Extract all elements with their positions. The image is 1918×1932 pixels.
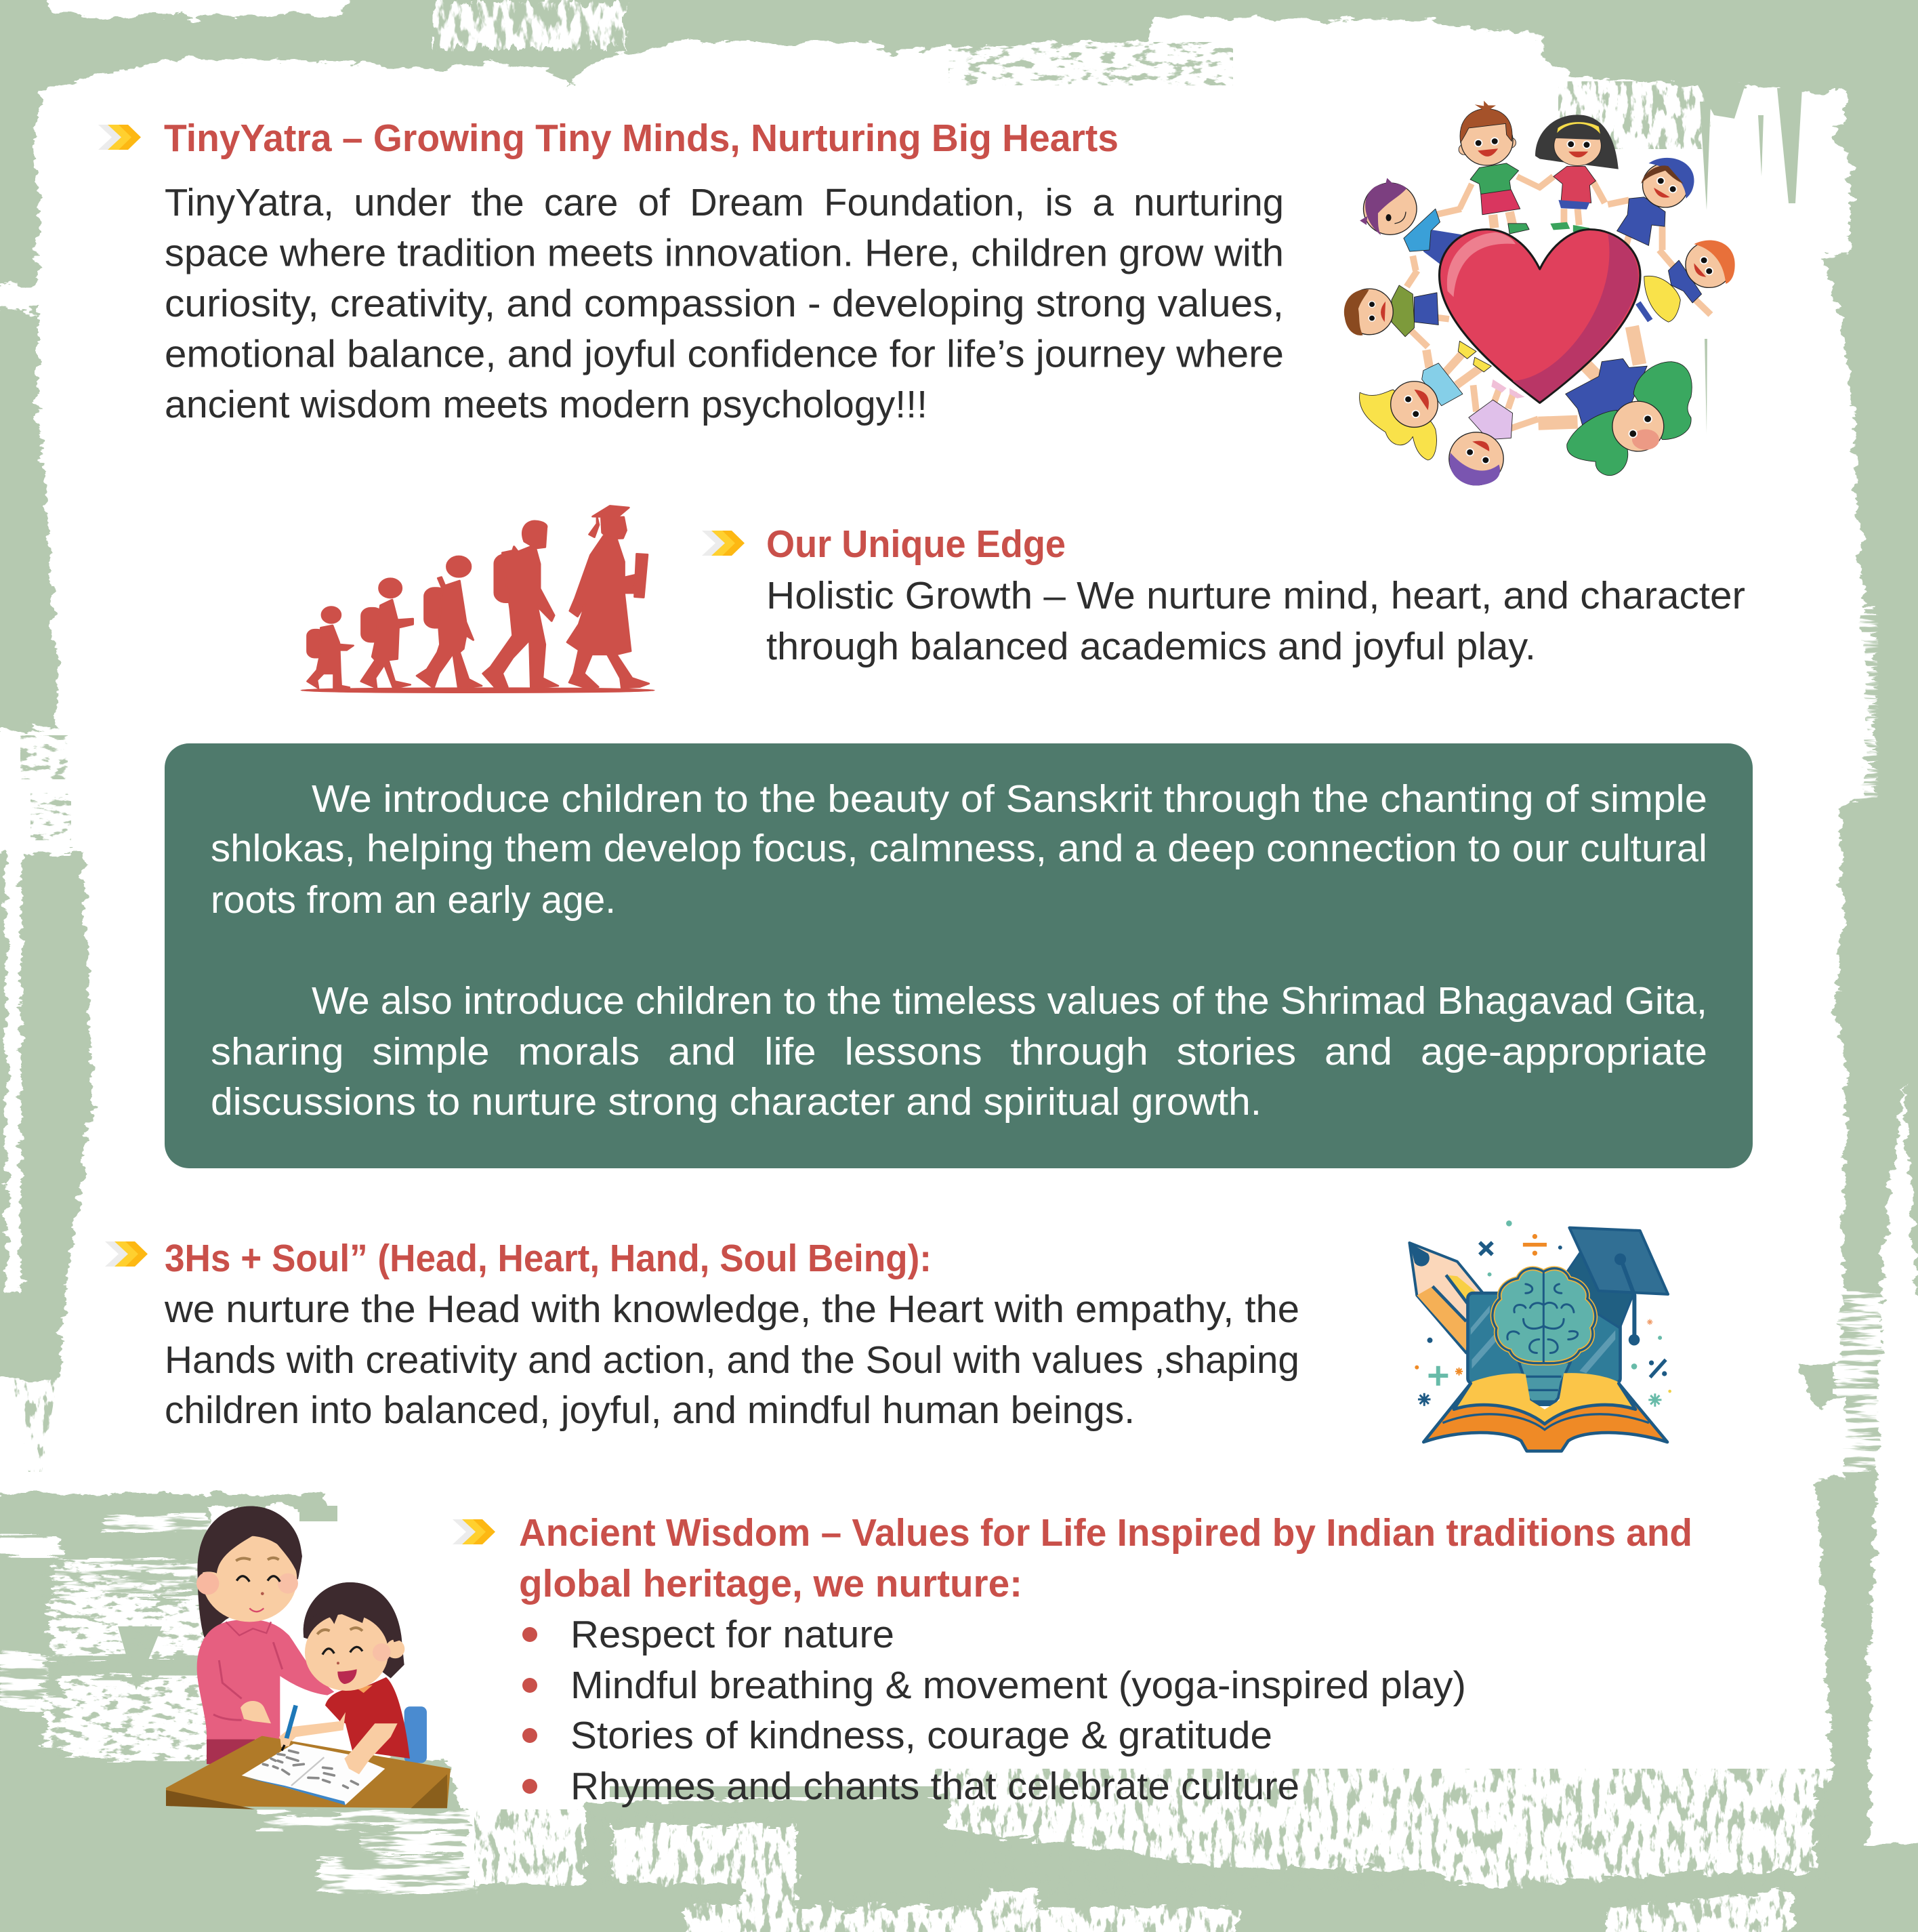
text block: head heart hands soul: we nurture the Head with knowledge, the Heart with empathy, the	[164, 1288, 1299, 1331]
heading: Our Unique Edge: Our Unique Edge	[766, 522, 1066, 566]
silhouette: school child	[417, 556, 482, 688]
section 1: TinyYatra intro	[98, 117, 1284, 426]
heading: 3Hs + Soul: 3Hs + Soul” (Head, Heart, Hand, Soul Being):	[165, 1237, 932, 1280]
list: values	[522, 1613, 1466, 1808]
illustration: growth silhouettes from toddler to graduate	[301, 506, 654, 693]
light bulb base	[1519, 1362, 1570, 1405]
heading: Ancient Wisdom: Ancient Wisdom – Values for Life Inspired by Indian traditions and	[519, 1511, 1692, 1555]
math symbols and sparkles	[1415, 1220, 1671, 1407]
ground line	[301, 688, 654, 693]
text block: Gita paragraph: discussions to nurture strong character and spiritual growth.	[211, 1080, 1262, 1124]
text block: Sanskrit paragraph	[211, 777, 1707, 922]
silhouette: small child	[361, 579, 413, 688]
text block: head heart hands soul: Hands with creativity and action, and the Soul with values ,shaping	[165, 1338, 1299, 1382]
silhouette: toddler	[308, 607, 353, 689]
icon: chevron bullet	[98, 125, 141, 150]
pencil	[1409, 1243, 1483, 1353]
text block: Sanskrit paragraph: roots from an early age.	[211, 878, 616, 922]
kid: child with purple hair at the bottom	[1449, 379, 1539, 486]
list: values: Rhymes and chants that celebrate culture	[570, 1765, 1299, 1808]
text block: Gita paragraph: sharing simple morals and life lessons through stories and age-appropriate	[211, 1030, 1707, 1073]
text block: intro paragraph	[165, 181, 1284, 426]
section 3: 3Hs + Soul	[105, 1237, 1299, 1432]
icon: chevron bullet	[702, 531, 745, 556]
kid: blond girl	[1360, 341, 1491, 460]
graduation cap	[1567, 1228, 1668, 1345]
text block: intro paragraph: space where tradition meets innovation. Here, children grow with	[165, 232, 1284, 275]
text block: Sanskrit paragraph: We introduce children to the beauty of Sanskrit through the chanting of simple	[312, 777, 1707, 821]
brain	[1493, 1269, 1596, 1363]
kid: large child with green hair	[1539, 327, 1692, 476]
kid: girl with black hair	[1535, 115, 1619, 232]
heading: TinyYatra: TinyYatra – Growing Tiny Minds, Nurturing Big Hearts	[164, 117, 1119, 160]
kid: boy with blue cap	[1608, 158, 1694, 256]
kid: girl with orange hair	[1638, 240, 1735, 322]
kid: boy with brown hair on the left	[1344, 270, 1449, 347]
heart	[1439, 230, 1640, 403]
text block: holistic growth: Holistic Growth – We nurture mind, heart, and character	[766, 574, 1745, 617]
child	[279, 1582, 410, 1759]
tablet screen	[1467, 1293, 1621, 1383]
text block: holistic growth	[766, 574, 1745, 668]
text block: Gita paragraph: We also introduce children to the timeless values of the Shrimad Bhagavad Gita,	[312, 979, 1707, 1023]
kid: purple-haired child top left	[1360, 178, 1465, 270]
list: values: Respect for nature	[570, 1613, 894, 1656]
silhouette: teenager	[483, 521, 558, 688]
section 2: Our Unique Edge	[702, 522, 1745, 668]
mother	[196, 1506, 334, 1764]
silhouette: graduate with cap and diploma	[567, 506, 649, 688]
list: values: Mindful breathing & movement (yoga-inspired play)	[570, 1664, 1466, 1707]
heading: Ancient Wisdom	[519, 1511, 1692, 1605]
illustration: mother helping child study at a desk	[166, 1506, 451, 1809]
text block: intro paragraph: emotional balance, and joyful confidence for life’s journey where	[165, 332, 1284, 375]
chair	[404, 1706, 427, 1763]
illustration: children holding hands around a heart	[1344, 101, 1735, 486]
desk with open book	[166, 1723, 451, 1809]
text block: Sanskrit paragraph: shlokas, helping them develop focus, calmness, and a deep connection to our cultural	[211, 827, 1707, 870]
text block: head heart hands soul	[164, 1288, 1299, 1432]
text block: head heart hands soul: children into balanced, joyful, and mindful human beings.	[165, 1389, 1135, 1432]
list: values: Stories of kindness, courage & gratitude	[570, 1714, 1272, 1757]
section 4: Ancient Wisdom	[453, 1511, 1692, 1808]
kid: girl with brown hair	[1459, 101, 1541, 234]
text block: intro paragraph: TinyYatra, under the care of Dream Foundation, is a nurturing	[165, 181, 1284, 224]
icon: chevron bullet	[105, 1241, 148, 1267]
illustration: brain bulb, book, pencil and graduation cap	[1409, 1220, 1671, 1451]
open book	[1423, 1373, 1667, 1451]
heading: Ancient Wisdom: global heritage, we nurture:	[519, 1562, 1022, 1605]
text block: intro paragraph: curiosity, creativity, and compassion - developing strong values,	[165, 282, 1284, 325]
panel: Sanskrit and Gita	[165, 743, 1753, 1168]
text block: holistic growth: through balanced academics and joyful play.	[766, 625, 1536, 668]
text block: Gita paragraph	[211, 979, 1707, 1124]
text block: intro paragraph: ancient wisdom meets modern psychology!!!	[165, 383, 927, 426]
icon: chevron bullet	[453, 1519, 495, 1544]
